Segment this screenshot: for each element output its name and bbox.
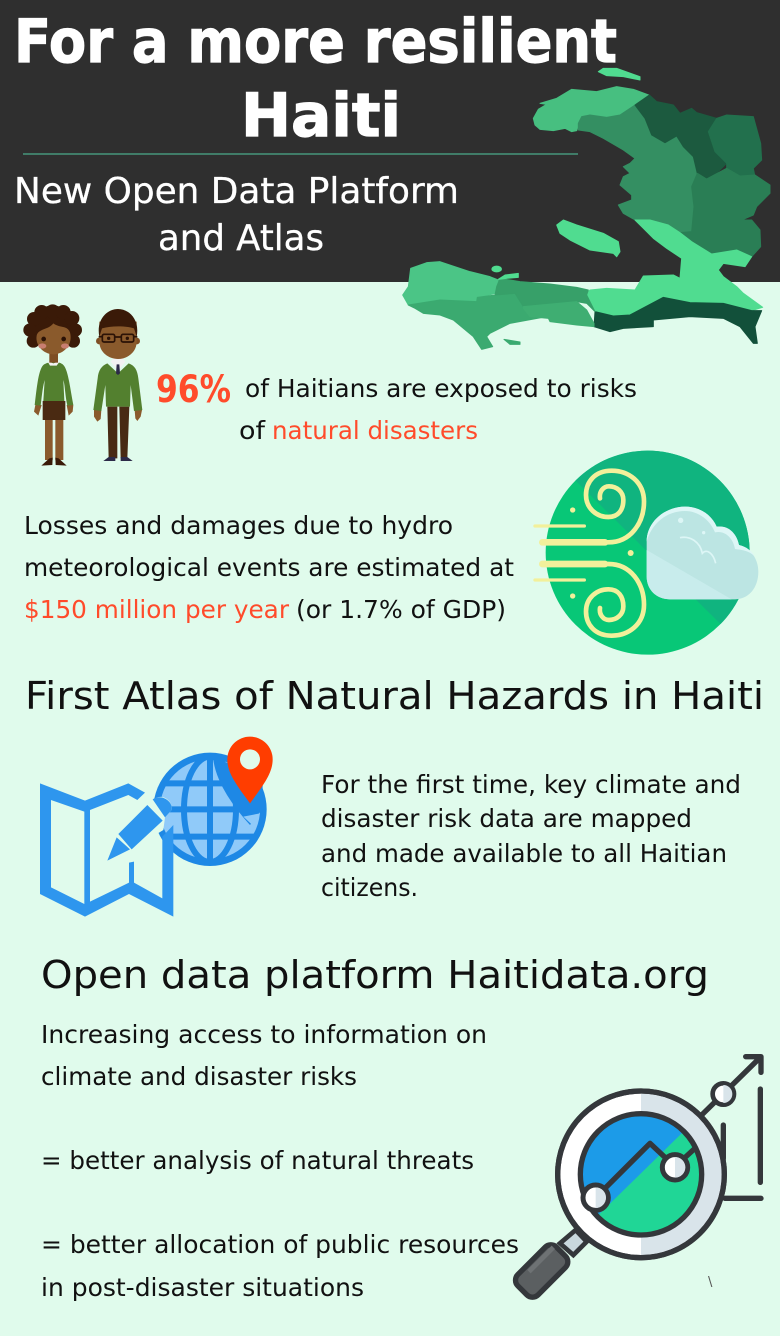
text block: losses and damages xyxy=(24,511,514,624)
heading: first atlas: First Atlas of Natural Hazards in Haiti xyxy=(25,674,764,718)
stat: 96% exposed to risks xyxy=(156,368,637,445)
text block: first time xyxy=(321,770,741,902)
text block: access to information: in post-disaster situations xyxy=(41,1273,364,1302)
icon: two people xyxy=(23,304,142,466)
text block: access to information: = better allocation of public resources xyxy=(41,1230,519,1259)
text block: access to information: = better analysis of natural threats xyxy=(41,1146,474,1175)
man xyxy=(93,309,142,461)
text block: first time: disaster risk data are mapped xyxy=(321,804,692,833)
woman xyxy=(23,304,82,466)
icon: wind and cloud xyxy=(535,445,765,655)
text block: first time: For the first time, key climate and xyxy=(321,770,741,799)
text block: access to information xyxy=(41,1020,519,1302)
title xyxy=(14,7,617,151)
text block: first time: and made available to all Haitian xyxy=(321,839,727,868)
subtitle xyxy=(14,171,459,259)
icon: map, globe and pin xyxy=(40,737,273,917)
subtitle: and Atlas xyxy=(158,218,324,259)
title: Haiti xyxy=(241,81,401,151)
panel: header xyxy=(0,0,780,282)
text block: first time: citizens. xyxy=(321,873,418,902)
stat: 96% exposed to risks: 96% xyxy=(156,368,231,411)
text block: losses and damages: (or 1.7% of GDP) xyxy=(296,595,506,624)
title: For a more resilient xyxy=(14,7,617,77)
subtitle: New Open Data Platform xyxy=(14,171,459,212)
text block: losses and damages: Losses and damages due to hydro xyxy=(24,511,453,540)
text block: access to information: climate and disaster risks xyxy=(41,1062,357,1091)
heading: open data platform: Open data platform Haitidata.org xyxy=(41,953,709,997)
stray backslash mark: \ xyxy=(708,1275,713,1290)
map of Haiti xyxy=(403,68,770,349)
text block: access to information: Increasing access to information on xyxy=(41,1020,487,1049)
text block: losses and damages: $150 million per year xyxy=(24,595,290,624)
stat: 96% exposed to risks: of xyxy=(239,416,267,445)
icon: magnifier over chart xyxy=(512,1057,761,1300)
text block: losses and damages: meteorological events are estimated at xyxy=(24,553,514,582)
stat: 96% exposed to risks: of Haitians are exposed to risks xyxy=(245,374,637,403)
stat: 96% exposed to risks: natural disasters xyxy=(272,416,478,445)
